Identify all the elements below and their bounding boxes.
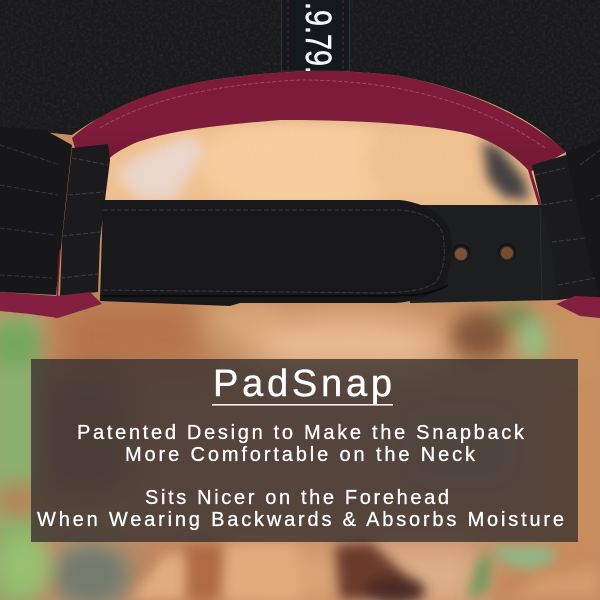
translucent caption panel — [31, 359, 578, 542]
left maroon underside — [0, 292, 102, 318]
woven neck label: .9.79. — [298, 2, 339, 74]
woven neck label — [281, 0, 350, 74]
hat underside: black fleece lining — [0, 0, 600, 160]
left side hat panel and tab — [0, 127, 110, 318]
snap rivet right — [498, 243, 516, 261]
text: forehead line 1: Sits Nicer on the Forehead — [145, 487, 449, 509]
black leather snap strap — [410, 205, 558, 303]
snap rivet left — [452, 244, 470, 262]
right side hat panel and tab — [528, 140, 600, 300]
heading: PadSnap — [213, 363, 392, 405]
text: forehead line 2: When Wearing Backwards & Absorbs Moisture — [37, 509, 564, 531]
maroon sweatband arc — [72, 71, 566, 172]
padded fabric snap cover — [100, 200, 452, 306]
text: comfort line 2: More Comfortable on the Neck — [125, 444, 476, 466]
heading underline — [212, 404, 393, 406]
text: comfort line 1: Patented Design to Make the Snapback — [77, 422, 525, 444]
right maroon underside — [556, 296, 600, 318]
